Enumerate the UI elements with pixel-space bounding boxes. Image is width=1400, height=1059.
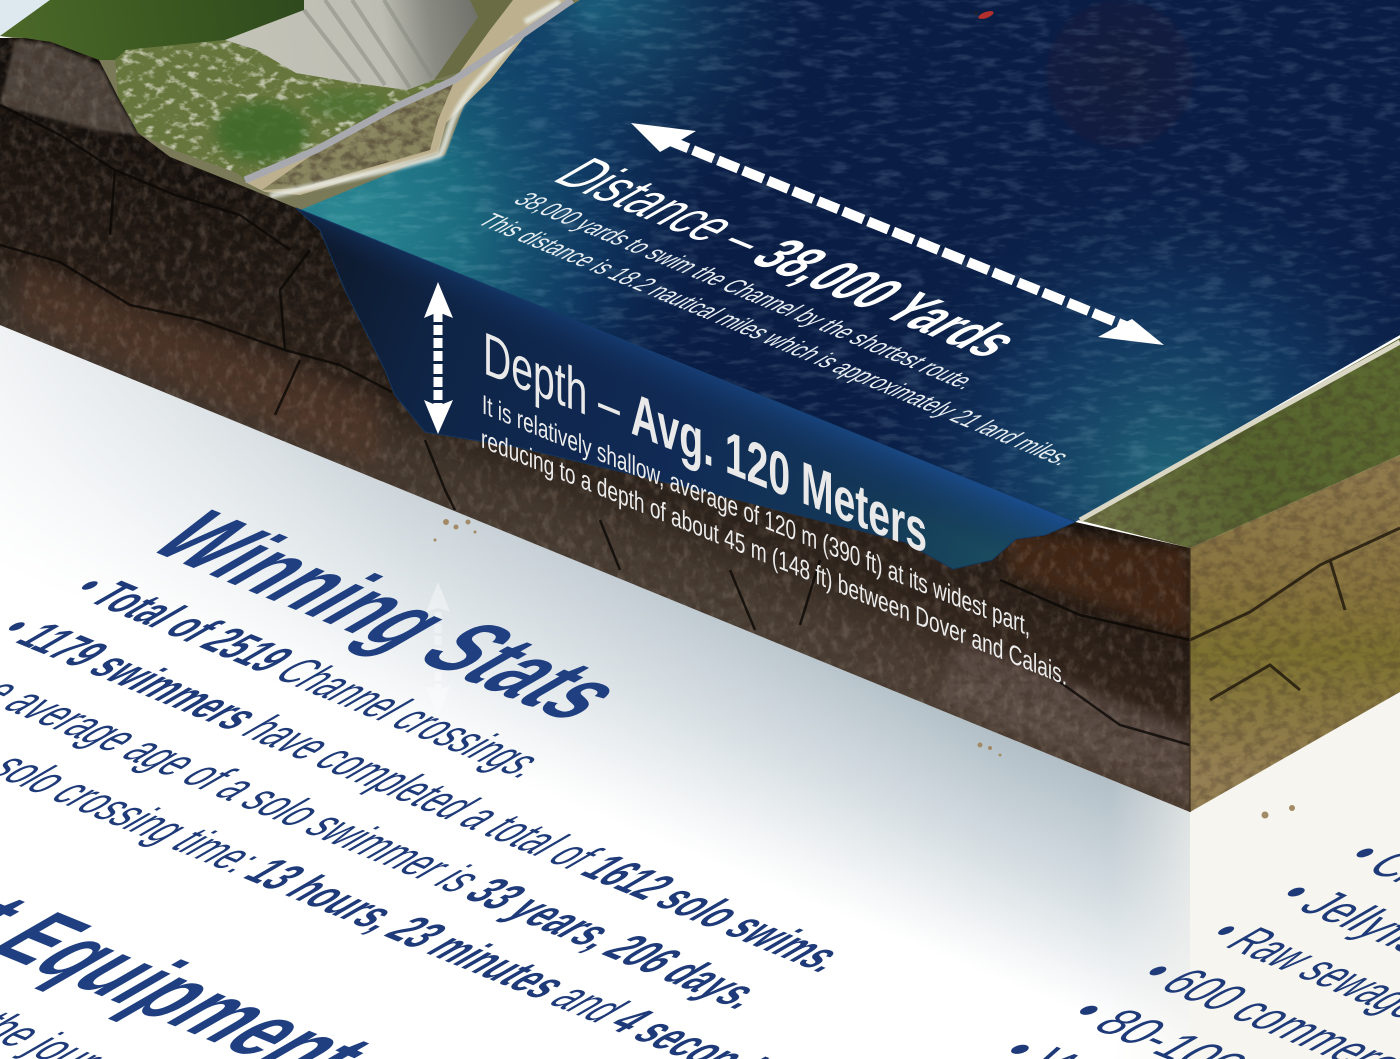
depth arrow	[424, 282, 453, 434]
left land: grass	[0, 0, 310, 60]
left land: scrub under road	[262, 84, 453, 190]
left land: green strip by road	[434, 0, 513, 80]
distance description: 38,000 yards to swim the Channel by the shortest route.	[506, 189, 986, 393]
soil cross-section front face	[0, 30, 1190, 820]
right land beach strip	[1080, 342, 1400, 520]
depth description: It is relatively shallow, average of 120 m (390 ft) at its widest part,	[482, 389, 1030, 642]
distance arrow	[631, 123, 1164, 345]
heading: distance: Distance – 38,000 Yards	[538, 150, 1039, 366]
cast shadow on the floor	[0, 325, 1190, 1059]
depth description: reducing to a depth of about 45 m (148 ft) between Dover and Calais.	[481, 423, 1067, 691]
heading: depth: Depth – Avg. 120 Meters	[483, 319, 927, 567]
left land: base ground	[0, 0, 580, 210]
faded arrow reflection on floor	[426, 582, 450, 716]
left land: beach	[245, 0, 569, 195]
left land: surf foam	[270, 2, 560, 196]
left land: coastal road	[245, 0, 572, 180]
hazards list	[985, 834, 1400, 1059]
crumbs: loose soil	[434, 519, 1295, 818]
right side soil face	[1190, 450, 1400, 820]
swimmer in the water	[974, 9, 995, 21]
distance description: This distance is 18.2 nautical miles which is approximately 21 land miles.	[470, 210, 1082, 469]
water cross-section	[296, 208, 1075, 569]
soil cracks	[0, 105, 1190, 745]
winning stats list: • Total of 2519 Channel crossings.	[57, 567, 565, 785]
winning stats list: • 1179 swimmers have completed a total of 1612 solo swims.	[0, 608, 865, 979]
left land: scrub slope	[115, 40, 446, 180]
right land grass	[1078, 335, 1400, 550]
depth description	[481, 389, 1067, 691]
sea surface	[250, 0, 1400, 530]
background: cream floor right of seam	[1188, 692, 1400, 1059]
top left corner of floor	[0, 0, 50, 36]
heading: winning stats: Winning Stats	[124, 498, 656, 734]
left land: white cliff	[225, 0, 478, 90]
